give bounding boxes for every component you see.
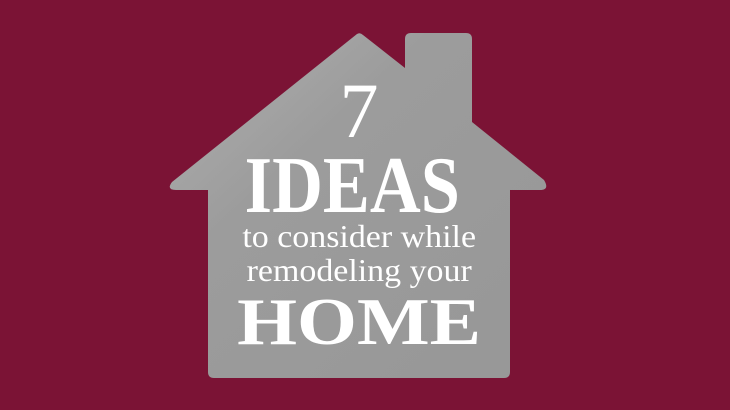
title: HOME: HOME xyxy=(237,285,481,359)
title: 7: 7 xyxy=(340,67,378,154)
title: IDEAS: IDEAS xyxy=(244,142,460,230)
subtitle line 1: to consider while xyxy=(242,218,476,254)
subtitle line 2: remodeling your xyxy=(246,252,472,288)
